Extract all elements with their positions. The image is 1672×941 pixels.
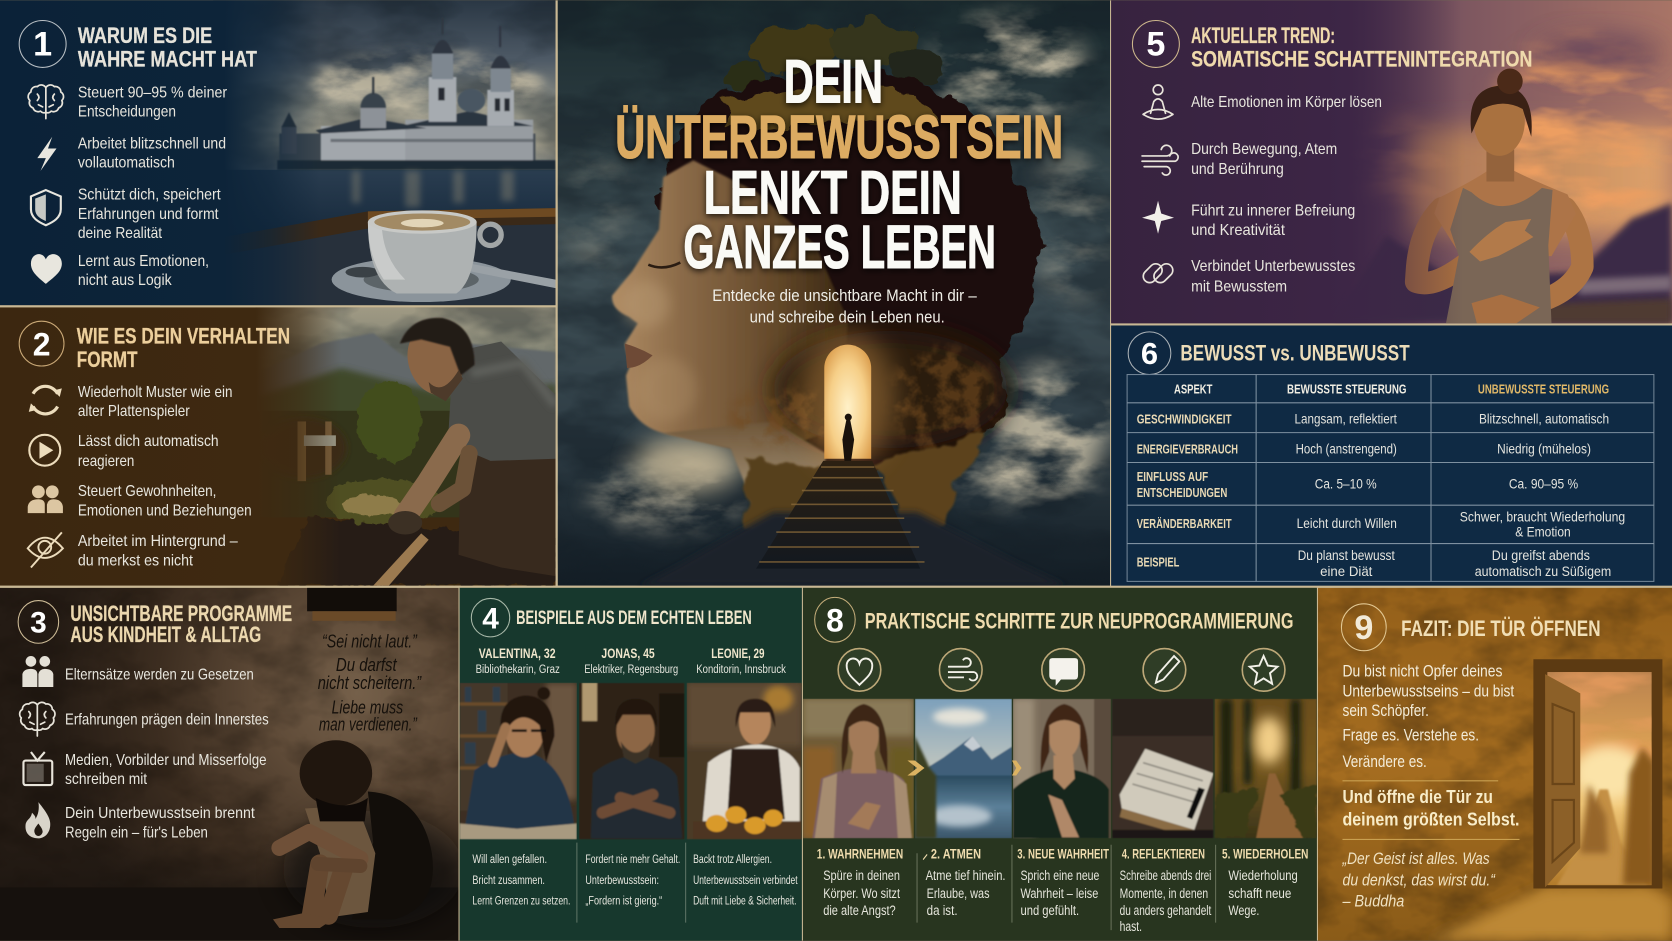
Valentina caption <box>472 852 570 907</box>
icon: crossed eye <box>28 532 63 568</box>
arrows between steps <box>907 761 1022 775</box>
table rows: GESCHWINDIGKEIT <box>1137 412 1232 427</box>
number badge 4 <box>471 598 510 637</box>
text list 5: Führt zu innerer Befreiung <box>1191 203 1355 220</box>
icon: cycle arrows <box>29 386 62 414</box>
icon: play <box>29 435 60 466</box>
conclusion text <box>1343 661 1515 771</box>
heading 1 <box>78 27 257 67</box>
table rows: Blitzschnell, automatisch <box>1479 411 1609 427</box>
heading 2: FORMT <box>77 347 138 372</box>
photo: Leonie <box>687 683 802 839</box>
heading 3: AUS KINDHEIT & ALLTAG <box>70 622 261 647</box>
conclusion text: Unterbewusstseins – du bist <box>1343 682 1515 701</box>
step 1 text: die alte Angst? <box>823 902 896 918</box>
Buddha quote: – Buddha <box>1342 892 1404 911</box>
text list 3: Elternsätze werden zu Gesetzen <box>65 667 254 684</box>
title: ÜNTERBEWUSSTSEIN <box>615 103 1063 171</box>
text list 1: nicht aus Logik <box>78 272 173 289</box>
text list 5: Alte Emotionen im Körper lösen <box>1191 94 1382 111</box>
text list 5 <box>1191 94 1382 295</box>
table rows: EINFLUSS AUF <box>1137 469 1208 484</box>
text list 1: Lernt aus Emotionen, <box>78 253 209 270</box>
heading 3: UNSICHTBARE PROGRAMME <box>70 601 292 626</box>
icon: heart <box>31 254 62 284</box>
icon: parents and child <box>22 656 53 687</box>
quote on wall: Liebe muss <box>332 698 403 718</box>
title <box>615 48 1063 281</box>
step 5 text: Wiederholung <box>1228 867 1298 883</box>
heading 5: SOMATISCHE SCHATTENINTEGRATION <box>1191 46 1532 71</box>
subtitle: Entdecke die unsichtbare Macht in dir – <box>712 286 977 305</box>
Valentina caption: Bricht zusammen. <box>472 873 545 887</box>
number badge 4: 4 <box>482 602 499 635</box>
text list 5: Verbindet Unterbewusstes <box>1191 258 1355 275</box>
number badge 8: 8 <box>826 603 844 639</box>
conclusion text: Du bist nicht Opfer deines <box>1343 661 1502 680</box>
call to action: Und öffne die Tür zu <box>1343 787 1493 807</box>
table rows: VERÄNDERBARKEIT <box>1137 516 1232 531</box>
step 5 text <box>1222 846 1308 918</box>
icon: meditation <box>1143 85 1173 119</box>
icon: people <box>28 485 63 513</box>
text list 2: Steuert Gewohnheiten, <box>78 483 216 500</box>
persona labels: Elektriker, Regensburg <box>584 662 678 676</box>
icon: shield <box>31 190 61 225</box>
quote on wall: Du darfst <box>336 655 397 675</box>
comparison table <box>1127 375 1654 581</box>
number badge 5: 5 <box>1146 26 1165 64</box>
table rows: Niedrig (mühelos) <box>1497 440 1591 456</box>
table header: BEWUSSTE STEUERUNG <box>1287 382 1406 397</box>
photo: mountain lake <box>915 699 1012 838</box>
photo: Valentina <box>460 683 577 839</box>
step 2 text <box>922 846 1006 918</box>
table rows: Langsam, reflektiert <box>1295 411 1397 427</box>
step 2 text: ⸝ 2. ATMEN <box>922 846 981 862</box>
table rows: ENTSCHEIDUNGEN <box>1137 485 1227 500</box>
panel 9: Fazit <box>1318 588 1672 941</box>
step 5 text: Wege. <box>1228 902 1259 918</box>
persona labels: Bibliothekarin, Graz <box>476 662 560 676</box>
number badge 1 <box>19 21 66 67</box>
step 2 text: Atme tief hinein. <box>926 867 1006 883</box>
heading 6: BEWUSST vs. UNBEWUSST <box>1180 341 1410 366</box>
title: GANZES LEBEN <box>684 213 996 281</box>
panel 6: bewusst vs. unbewusst <box>1111 325 1672 586</box>
text list 1: Schützt dich, speichert <box>78 187 221 204</box>
heading 8: PRAKTISCHE SCHRITTE ZUR NEUPROGRAMMIERUNG <box>865 608 1293 633</box>
table rows: Leicht durch Willen <box>1297 515 1397 531</box>
number badge 9: 9 <box>1354 609 1373 647</box>
table rows: Ca. 90–95 % <box>1509 476 1578 492</box>
heading 5 <box>1191 27 1532 67</box>
icon: lightning <box>37 137 57 171</box>
Buddha quote: „Der Geist ist alles. Was <box>1342 849 1490 868</box>
persona labels: LEONIE, 29 <box>711 645 765 661</box>
text list 2: reagieren <box>78 453 134 470</box>
photo: woman with dark green shirt <box>1013 699 1111 838</box>
text list 3 <box>65 667 269 841</box>
number badge 6 <box>1128 332 1171 375</box>
step 4 text: 4. REFLEKTIEREN <box>1122 846 1205 862</box>
text list 5: und Berührung <box>1191 161 1284 178</box>
text list 5: Durch Bewegung, Atem <box>1191 141 1337 158</box>
step icons <box>838 649 1285 691</box>
heading 1: WARUM ES DIE <box>78 23 212 48</box>
Buddha quote: du denkst, das wirst du.“ <box>1343 870 1496 889</box>
photo: Salzburg skyline with coffee <box>160 0 556 305</box>
illustration: profile head with tree, door and stairs <box>558 0 1110 586</box>
number badge 5 <box>1132 21 1179 67</box>
table rows: eine Diät <box>1320 563 1373 579</box>
Jonas caption: „Fordern ist gierig.“ <box>585 893 662 907</box>
number badge 9 <box>1341 604 1386 651</box>
Valentina caption: Lernt Grenzen zu setzen. <box>472 893 570 907</box>
step 3 text: Sprich eine neue <box>1020 867 1100 883</box>
text list 3: schreiben mit <box>65 771 148 788</box>
text list 3: Regeln ein – für's Leben <box>65 824 208 841</box>
icon: television <box>23 752 52 785</box>
heading 4: BEISPIELE AUS DEM ECHTEN LEBEN <box>516 608 752 629</box>
panel 5: somatische Schattenintegration <box>1111 0 1672 323</box>
panel 8: praktische Schritte <box>803 588 1317 941</box>
table rows: Du greifst abends <box>1492 547 1590 563</box>
photo: woman with hand on chest <box>803 699 914 838</box>
conclusion text: Frage es. Verstehe es. <box>1343 725 1479 744</box>
number badge 3: 3 <box>30 607 47 640</box>
step 1 text: Spüre in deinen <box>823 867 900 883</box>
table rows: Schwer, braucht Wiederholung <box>1460 509 1625 525</box>
quote on wall <box>318 632 422 735</box>
conclusion text: sein Schöpfer. <box>1343 701 1429 720</box>
icon: wind <box>1142 145 1178 175</box>
persona labels <box>476 645 787 676</box>
panel: centre hero <box>558 0 1110 586</box>
step 3 text: Wahrheit – leise <box>1020 885 1099 901</box>
heading 5: AKTUELLER TREND: <box>1191 23 1335 48</box>
heading 1: WAHRE MACHT HAT <box>78 46 257 71</box>
step 2 text: da ist. <box>927 902 958 918</box>
number badge 6: 6 <box>1141 336 1158 371</box>
number badge 2 <box>19 321 64 366</box>
step 5 text: schafft neue <box>1228 885 1292 901</box>
text list 2: Arbeitet im Hintergrund – <box>78 533 238 550</box>
text list 2 <box>78 384 252 569</box>
text list 2: Lässt dich automatisch <box>78 433 219 450</box>
step 2 text: Erlaube, was <box>927 885 990 901</box>
heading 2: WIE ES DEIN VERHALTEN <box>77 324 290 349</box>
Leonie caption <box>693 852 798 907</box>
icon: flame <box>25 802 50 838</box>
step 1 text: 1. WAHRNEHMEN <box>817 846 903 862</box>
panel 4: Beispiele aus dem echten Leben <box>460 588 802 941</box>
quote on wall: nicht scheitern.” <box>318 673 422 693</box>
title: LENKT DEIN <box>704 159 962 227</box>
panel 3: unsichtbare Programme <box>0 588 464 941</box>
step 1 text <box>817 846 903 918</box>
icon: brain <box>28 85 64 119</box>
step 4 text: du anders gehandelt <box>1120 902 1211 918</box>
table rows: Du planst bewusst <box>1298 547 1395 563</box>
text list 1: deine Realität <box>78 225 163 242</box>
persona labels: JONAS, 45 <box>601 645 655 661</box>
Jonas caption: Unterbewusstsein: <box>585 873 659 887</box>
table rows: automatisch zu Süßigem <box>1475 563 1611 579</box>
step 4 text: Schreibe abends drei <box>1120 867 1211 883</box>
table header: UNBEWUSSTE STEUERUNG <box>1478 382 1609 397</box>
step 3 text: 3. NEUE WAHRHEIT <box>1017 846 1109 862</box>
table header: ASPEKT <box>1174 382 1212 397</box>
text list 2: Wiederholt Muster wie ein <box>78 384 232 401</box>
Leonie caption: Duft mit Liebe & Sicherheit. <box>693 893 797 907</box>
text list 2: Emotionen und Beziehungen <box>78 502 252 519</box>
title: DEIN <box>784 48 883 116</box>
text list 1: Steuert 90–95 % deiner <box>78 84 228 101</box>
Jonas caption: Fordert nie mehr Gehalt. <box>585 852 680 866</box>
step 1 text: Körper. Wo sitzt <box>823 885 900 901</box>
step 3 text <box>1017 846 1109 918</box>
call to action <box>1343 787 1520 830</box>
conclusion text: Verändere es. <box>1343 752 1427 771</box>
photo: Jonas <box>579 683 685 839</box>
quote on wall: “Sei nicht laut.” <box>322 632 418 652</box>
text list 1: Entscheidungen <box>78 103 176 120</box>
step 5 text: 5. WIEDERHOLEN <box>1222 846 1308 862</box>
text list 3: Dein Unterbewusstsein brennt <box>65 805 255 822</box>
number badge 3 <box>18 601 59 643</box>
Valentina caption: Will allen gefallen. <box>472 852 547 866</box>
Leonie caption: Backt trotz Allergien. <box>693 852 772 866</box>
heading 3 <box>70 605 292 642</box>
photo: child sitting by the wall <box>0 588 464 941</box>
Buddha quote <box>1342 849 1496 911</box>
quote on wall: man verdienen.” <box>319 715 418 735</box>
subtitle <box>714 289 977 322</box>
number badge 2: 2 <box>33 326 50 362</box>
table header <box>1174 382 1609 397</box>
text list 5: mit Bewusstem <box>1191 278 1287 295</box>
step 4 text: hast. <box>1120 918 1142 934</box>
text list 1: vollautomatisch <box>78 155 175 172</box>
text list 3: Erfahrungen prägen dein Innerstes <box>65 711 269 728</box>
text list 3: Medien, Vorbilder und Misserfolge <box>65 752 267 769</box>
table rows: BEISPIEL <box>1137 554 1179 569</box>
photo: forest path <box>1215 699 1317 838</box>
persona labels: VALENTINA, 32 <box>479 645 556 661</box>
text list 1: Erfahrungen und formt <box>78 206 219 223</box>
step 4 text <box>1120 846 1211 934</box>
Leonie caption: Unterbewusstsein verbindet <box>693 873 798 887</box>
table rows <box>1137 411 1625 579</box>
icon: sparkle <box>1142 201 1174 234</box>
number badge 1: 1 <box>33 26 52 64</box>
illustration: open door with sunset path <box>1429 659 1672 941</box>
step 3 text: und gefühlt. <box>1020 902 1079 918</box>
heading 9: FAZIT: DIE TÜR ÖFFNEN <box>1401 616 1601 641</box>
subtitle: und schreibe dein Leben neu. <box>750 307 945 326</box>
panel 1: warum es die wahre Macht hat <box>0 0 556 305</box>
persona labels: Konditorin, Innsbruck <box>696 662 787 676</box>
table rows: & Emotion <box>1515 524 1571 540</box>
step 4 text: Momente, in denen <box>1120 885 1208 901</box>
heading 2 <box>76 328 290 368</box>
photo: man gardening in mountains <box>256 307 556 589</box>
table rows: ENERGIEVERBRAUCH <box>1137 441 1238 456</box>
text list 2: du merkst es nicht <box>78 552 193 569</box>
text list 1: Arbeitet blitzschnell und <box>78 135 226 152</box>
photo: woman breathing at sunset <box>1335 23 1672 324</box>
call to action: deinem größten Selbst. <box>1343 810 1520 830</box>
number badge 8 <box>815 597 855 642</box>
icon: brain <box>20 702 55 736</box>
Jonas caption <box>585 852 680 907</box>
icon: chain link <box>1142 263 1174 284</box>
photo: notebook on table <box>1112 699 1213 838</box>
text list 1 <box>78 84 228 289</box>
table rows: Ca. 5–10 % <box>1315 476 1377 492</box>
panel 2: wie es dein Verhalten formt <box>0 307 556 589</box>
table rows: Hoch (anstrengend) <box>1296 440 1397 456</box>
text list 5: und Kreativität <box>1191 222 1285 239</box>
text list 2: alter Plattenspieler <box>78 403 190 420</box>
